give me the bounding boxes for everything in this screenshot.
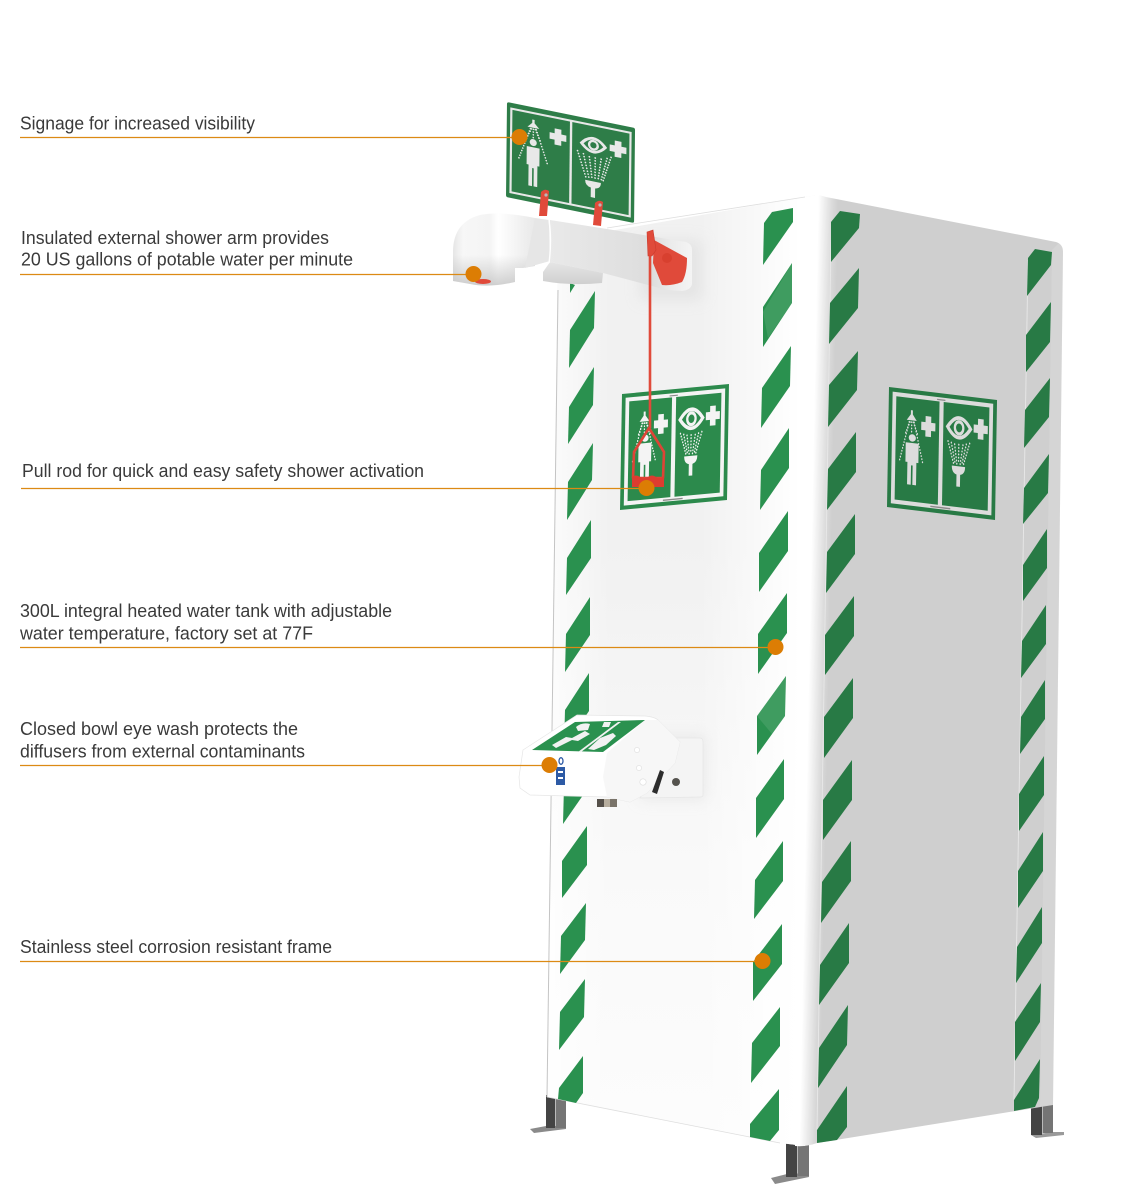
eye wash unit [519, 715, 706, 807]
callout: shower arm [20, 228, 482, 282]
label text: diffusers from external contaminants [20, 742, 305, 762]
leader line [20, 136, 519, 138]
elbow [453, 214, 535, 286]
leader line [20, 960, 762, 962]
valve [652, 770, 664, 794]
marker [754, 953, 770, 969]
right flank [603, 720, 680, 802]
leader line [20, 646, 775, 648]
label text: Insulated external shower arm provides [21, 228, 329, 248]
green label [532, 720, 645, 752]
wall shadow [640, 735, 706, 800]
sign brackets [539, 190, 603, 226]
hazard stripes: front right [750, 208, 793, 1141]
bottom fitting [597, 799, 617, 807]
shadow: arm on wall [640, 240, 702, 300]
callout: pull rod [21, 461, 654, 496]
pull handle [633, 428, 664, 478]
callout: signage [20, 114, 528, 145]
blue badge [556, 758, 565, 785]
callout: eye wash [20, 719, 558, 773]
sign: front face [620, 384, 729, 510]
marker [466, 266, 482, 282]
side face [795, 195, 1063, 1146]
back plate [640, 738, 703, 798]
label text: Signage for increased visibility [20, 114, 255, 134]
leader line [21, 488, 646, 490]
label text: 300L integral heated water tank with adjustable [20, 601, 392, 621]
marker [638, 480, 654, 496]
sign: top mounted [506, 102, 635, 223]
main body [519, 715, 680, 802]
leg: right [1031, 1103, 1064, 1138]
label symbols [552, 722, 621, 752]
legs [530, 1095, 1064, 1184]
hazard stripes: front left [558, 283, 595, 1103]
mount block [543, 262, 603, 284]
shower nozzle [475, 279, 491, 284]
leg: centre [771, 1140, 809, 1184]
hazard stripes: side left [817, 211, 860, 1143]
callout: water tank [19, 601, 783, 655]
sleeve [525, 218, 550, 268]
sign: side face [887, 387, 997, 520]
label text: water temperature, factory set at 77F [19, 624, 313, 644]
label text: 20 US gallons of potable water per minute [21, 250, 353, 270]
pull rod [632, 256, 664, 487]
arm horizontal section [550, 220, 692, 291]
marker [768, 639, 784, 655]
shower arm [453, 214, 692, 291]
label text: Pull rod for quick and easy safety shower activation [22, 461, 424, 481]
label text: Stainless steel corrosion resistant frame [20, 937, 332, 957]
leader line [20, 274, 473, 276]
inlet [672, 778, 680, 786]
callout: frame [20, 937, 770, 969]
tank enclosure [547, 195, 1063, 1146]
marker [512, 129, 528, 145]
front face [547, 196, 822, 1146]
leg: front left [530, 1095, 566, 1133]
leader line [20, 764, 549, 766]
screws [634, 747, 646, 785]
marker [542, 757, 558, 773]
pull lever [647, 230, 687, 285]
label text: Closed bowl eye wash protects the [20, 719, 298, 739]
hazard stripes: side right [1014, 249, 1052, 1111]
